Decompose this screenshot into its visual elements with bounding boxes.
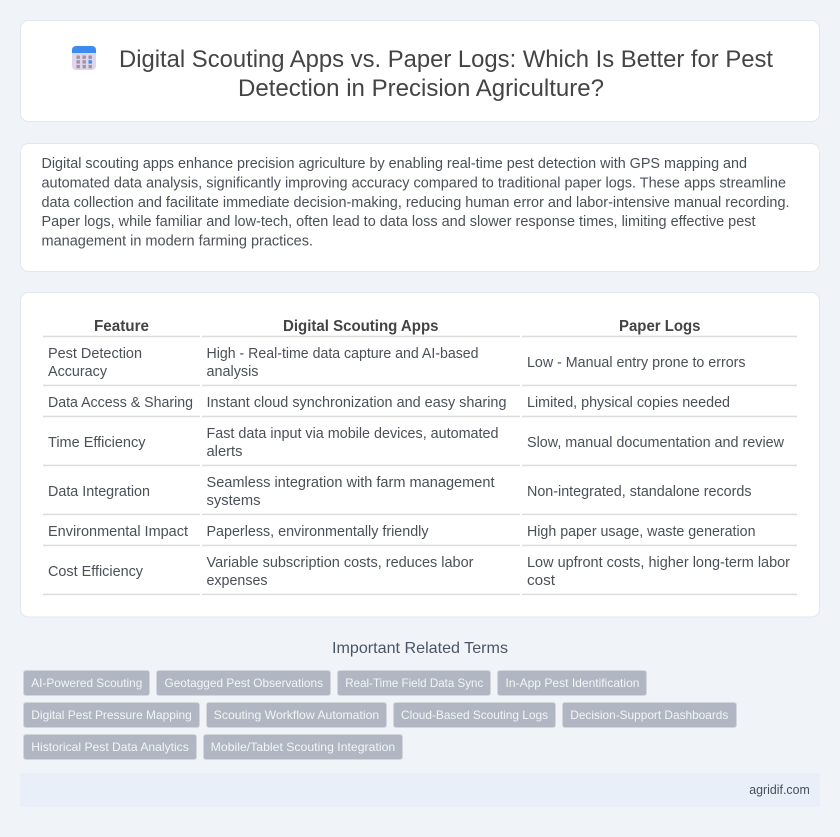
tag: Real-Time Field Data Sync (338, 670, 490, 696)
summary text: Paper logs, while familiar and low-tech, often lead to data loss and slower response times, limiting effective pest (42, 214, 756, 230)
column: feature: Pest Detection (48, 346, 142, 362)
tag: Digital Pest Pressure Mapping (24, 702, 200, 728)
column: feature: Cost Efficiency (48, 564, 144, 580)
header card (20, 20, 820, 122)
tag: Mobile/Tablet Scouting Integration (204, 734, 402, 760)
tag: Mobile/Tablet Scouting Integration: Mobile/Tablet Scouting Integration (211, 740, 395, 754)
header: paper logs: Paper Logs (619, 318, 700, 335)
title (119, 46, 773, 102)
summary text (42, 156, 790, 250)
icon: calendar (72, 46, 96, 70)
column: feature: Time Efficiency (48, 435, 146, 451)
summary text: management in modern farming practices. (42, 234, 313, 250)
title: Digital Scouting Apps vs. Paper Logs: Which Is Better for Pest (119, 46, 773, 73)
tag: Digital Pest Pressure Mapping: Digital Pest Pressure Mapping (31, 708, 192, 722)
column: paper logs: Low upfront costs, higher long-term labor (527, 555, 790, 571)
column: digital scouting apps: Seamless integration with farm management (206, 475, 495, 491)
tag: Historical Pest Data Analytics: Historical Pest Data Analytics (31, 740, 189, 754)
column: digital scouting apps (202, 318, 520, 595)
column: digital scouting apps: systems (206, 493, 260, 509)
tag: In-App Pest Identification: In-App Pest Identification (506, 676, 640, 690)
panel: comparison table (20, 292, 820, 617)
tag: Decision-Support Dashboards (562, 702, 736, 728)
heading: important related terms: Important Related Terms (332, 640, 508, 657)
column: feature (43, 318, 200, 595)
column: feature: Accuracy (48, 364, 108, 380)
tag: Decision-Support Dashboards: Decision-Support Dashboards (570, 708, 728, 722)
column: digital scouting apps: Variable subscription costs, reduces labor (206, 555, 474, 571)
tag: Cloud-Based Scouting Logs (394, 702, 556, 728)
tag: In-App Pest Identification (498, 670, 646, 696)
panel: header (20, 20, 820, 122)
header: digital scouting apps: Digital Scouting Apps (283, 318, 438, 335)
column: feature: Data Access & Sharing (48, 395, 193, 411)
column: paper logs (522, 318, 797, 595)
tag: AI-Powered Scouting (24, 670, 150, 696)
column: paper logs: Limited, physical copies needed (527, 395, 730, 411)
column: paper logs: cost (527, 573, 555, 589)
tag: Scouting Workflow Automation: Scouting Workflow Automation (214, 708, 379, 722)
table card (20, 292, 820, 617)
column: digital scouting apps: Paperless, environmentally friendly (206, 524, 429, 540)
title: Detection in Precision Agriculture? (238, 75, 604, 102)
column: digital scouting apps: alerts (206, 444, 242, 460)
column: feature: Data Integration (48, 484, 150, 500)
tag: Geotagged Pest Observations (156, 670, 330, 696)
footer source: agridif.com (749, 782, 810, 797)
tag: Scouting Workflow Automation (206, 702, 386, 728)
column: digital scouting apps: High - Real-time data capture and AI-based (206, 346, 478, 362)
tag: Geotagged Pest Observations: Geotagged Pest Observations (164, 676, 323, 690)
column: digital scouting apps: analysis (206, 364, 258, 380)
footer bar (20, 773, 820, 807)
tag: Real-Time Field Data Sync: Real-Time Field Data Sync (345, 676, 483, 690)
column: paper logs: High paper usage, waste generation (527, 524, 756, 540)
column: digital scouting apps: Instant cloud synchronization and easy sharing (206, 395, 506, 411)
summary card (20, 144, 820, 272)
tag: Cloud-Based Scouting Logs: Cloud-Based Scouting Logs (401, 708, 548, 722)
summary text: Digital scouting apps enhance precision agriculture by enabling real-time pest detection with GPS mapping and (42, 156, 747, 172)
tag: AI-Powered Scouting: AI-Powered Scouting (31, 676, 142, 690)
column: digital scouting apps: expenses (206, 573, 268, 589)
column: paper logs: Slow, manual documentation and review (527, 435, 785, 451)
summary text: automated data analysis, significantly improving accuracy compared to traditional paper logs. These apps streamline (42, 175, 786, 191)
column: digital scouting apps: Fast data input via mobile devices, automated (206, 426, 498, 442)
panel: related term tags (24, 670, 736, 760)
column: paper logs: Low - Manual entry prone to errors (527, 355, 746, 371)
panel: summary paragraph (20, 144, 820, 272)
column: paper logs: Non-integrated, standalone records (527, 484, 752, 500)
column: feature: Environmental Impact (48, 524, 188, 540)
header: feature: Feature (94, 318, 149, 335)
summary text: data collection and facilitate immediate decision-making, reducing human error and labor-intensive manual recording. (42, 195, 790, 211)
tag: Historical Pest Data Analytics (24, 734, 196, 760)
